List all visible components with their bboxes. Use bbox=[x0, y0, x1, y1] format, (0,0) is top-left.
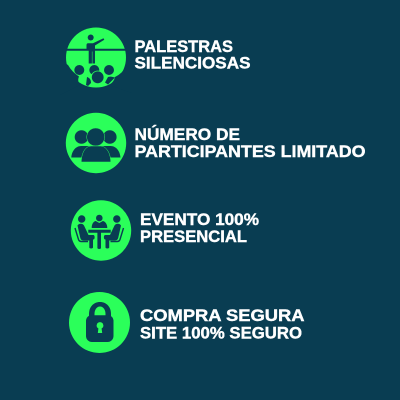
text: compra segura site 100% seguro: COMPRA SEGURA bbox=[140, 306, 304, 325]
text: evento 100% presencial: EVENTO 100% bbox=[140, 210, 259, 229]
icon: group of people bbox=[66, 113, 126, 173]
text: palestras silenciosas: SILENCIOSAS bbox=[134, 54, 250, 72]
text: numero de participantes limitado: PARTICIPANTES LIMITADO bbox=[134, 142, 366, 161]
text: numero de participantes limitado: NÚMERO DE bbox=[134, 125, 240, 144]
text: compra segura site 100% seguro bbox=[140, 306, 304, 342]
text: evento 100% presencial bbox=[140, 210, 259, 246]
text: palestras silenciosas: PALESTRAS bbox=[134, 37, 233, 56]
icon: meeting at table bbox=[71, 200, 131, 261]
icon: padlock bbox=[69, 292, 130, 353]
icon: speaker and audience bbox=[60, 28, 132, 95]
text: palestras silenciosas bbox=[134, 37, 250, 72]
text: evento 100% presencial: PRESENCIAL bbox=[140, 227, 247, 246]
text: compra segura site 100% seguro: SITE 100% SEGURO bbox=[140, 324, 302, 342]
text: numero de participantes limitado bbox=[134, 125, 366, 161]
